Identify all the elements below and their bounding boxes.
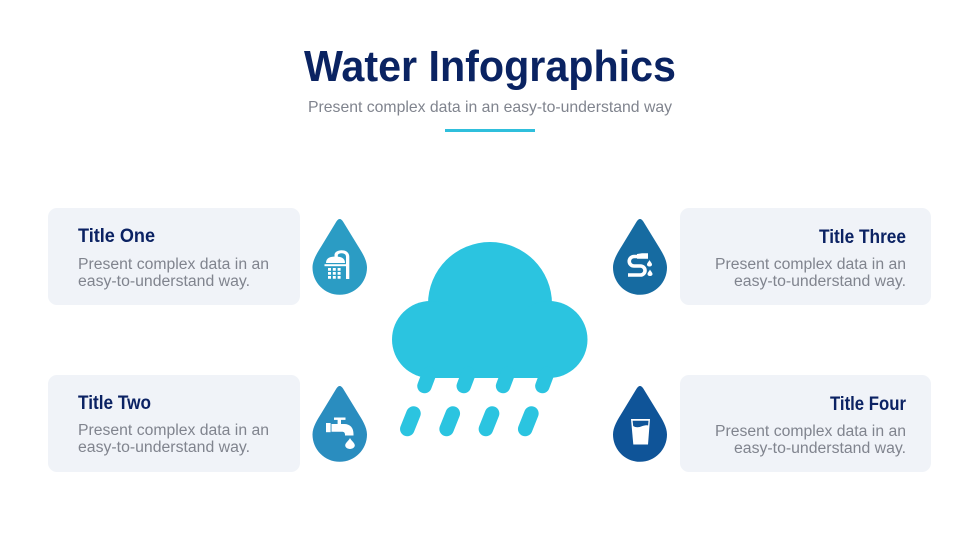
panel: title three [680,208,931,305]
panel: title two: Title Two [78,393,151,414]
panel: title one: easy-to-understand way. [78,273,250,290]
panel: title two: easy-to-understand way. [78,439,250,456]
icon: glass drop [613,386,667,462]
panel: title four: Title Four [830,394,907,415]
panel: title two: Present complex data in an [78,422,269,439]
panel: title one [48,208,300,305]
panel: title two [48,375,300,472]
title accent bar [445,129,535,132]
panel: title four: easy-to-understand way. [734,440,906,457]
icon: rain cloud [392,242,588,429]
panel: title four [680,375,931,472]
title: Water Infographics [304,42,676,91]
panel: title three: Present complex data in an [715,256,906,273]
panel: title one: Title One [78,226,155,247]
panel: title one: Present complex data in an [78,256,269,273]
icon: tap drop [312,386,367,462]
subtitle: Present complex data in an easy-to-understand way [308,99,672,116]
panel: title three: easy-to-understand way. [734,273,906,290]
icon: shower drop [312,219,367,295]
icon: hose drop [613,219,667,295]
panel: title three: Title Three [819,227,906,248]
hose line [628,256,645,275]
panel: title four: Present complex data in an [715,423,906,440]
